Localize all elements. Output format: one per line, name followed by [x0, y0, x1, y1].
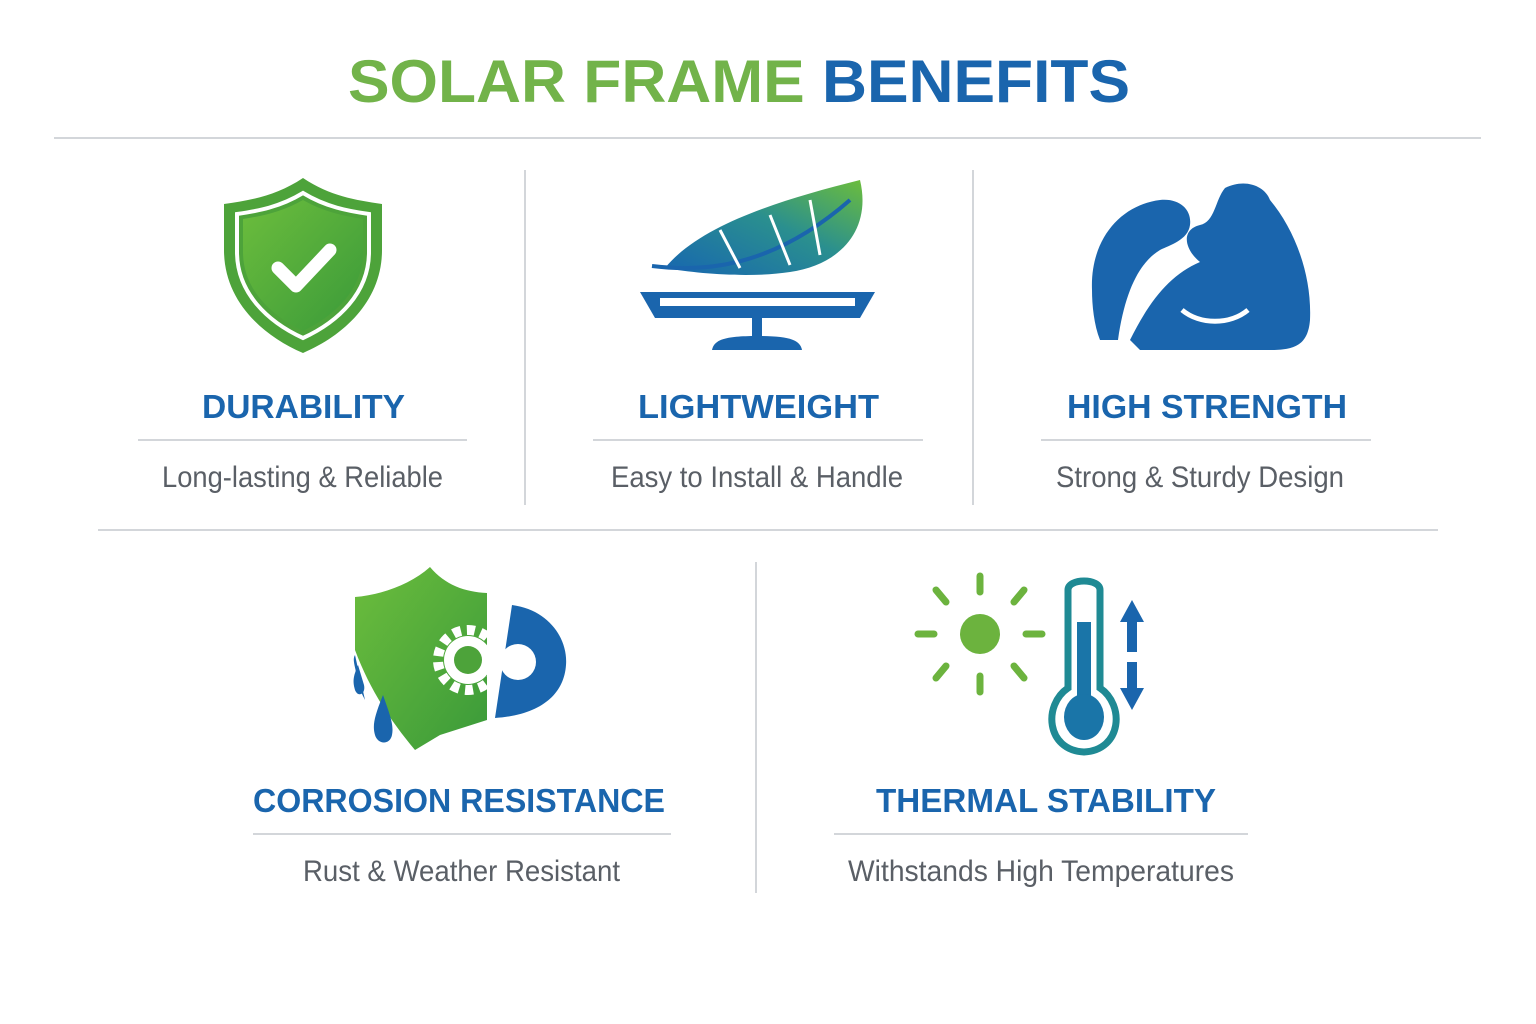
title: SOLAR FRAME BENEFITS [348, 48, 1130, 115]
heading: lightweight: LIGHTWEIGHT [638, 388, 879, 425]
panel: high strength [1056, 184, 1347, 494]
icon: flexed arm [1092, 184, 1310, 350]
panel: corrosion resistance [253, 567, 665, 888]
icon: sun thermometer arrows [918, 576, 1144, 752]
panel: lightweight [611, 180, 903, 494]
icon: shield gear drops [354, 567, 566, 750]
subtitle: corrosion resistance: Rust & Weather Resistant [303, 855, 621, 888]
subtitle: high strength: Strong & Sturdy Design [1056, 461, 1344, 494]
heading: corrosion resistance: CORROSION RESISTANCE [253, 782, 665, 819]
subtitle: lightweight: Easy to Install & Handle [611, 461, 903, 494]
subtitle: durability: Long-lasting & Reliable [162, 461, 443, 494]
subtitle: thermal stability: Withstands High Temperatures [848, 855, 1234, 888]
panel: thermal stability [848, 576, 1234, 888]
heading: high strength: HIGH STRENGTH [1067, 388, 1347, 425]
heading: durability: DURABILITY [202, 388, 405, 425]
heading: thermal stability: THERMAL STABILITY [876, 782, 1216, 819]
panel: durability [162, 178, 443, 494]
icon: feather on panel [640, 180, 875, 350]
icon: shield check [224, 178, 382, 353]
